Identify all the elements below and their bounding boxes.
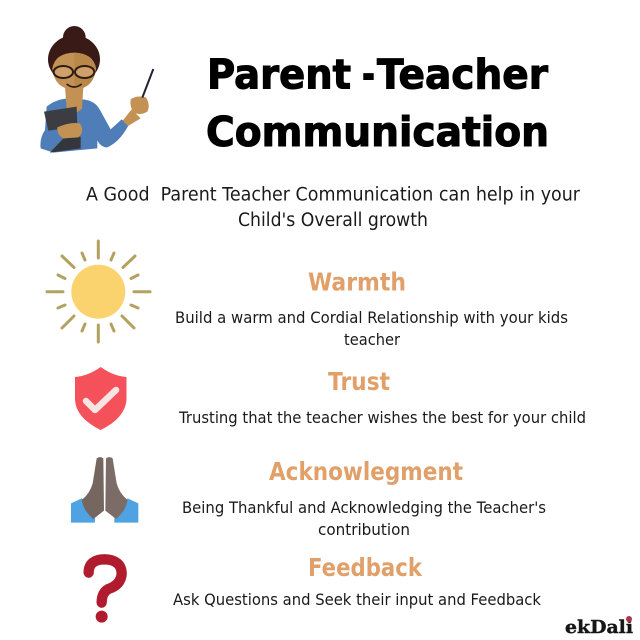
subtitle: A Good Parent Teacher Communication can help in your [86, 184, 580, 206]
text: warmth description: teacher [344, 330, 400, 349]
text: warmth description [175, 308, 568, 349]
icon: teacher with pointer [40, 26, 153, 153]
heading: acknowledgment: Acknowlegment [269, 457, 463, 486]
title: - [362, 50, 375, 98]
subtitle [86, 184, 580, 231]
text: feedback description: Ask Questions and Seek their input and Feedback [173, 590, 542, 609]
heading: feedback: Feedback [308, 553, 423, 582]
logo: ekDali: ekDali [565, 617, 633, 638]
heading: trust: Trust [328, 367, 390, 396]
heading: warmth: Warmth [308, 268, 406, 296]
text: warmth description: Build a warm and Cordial Relationship with your kids [175, 308, 568, 327]
title: Teacher [377, 50, 549, 98]
text: acknowledgment description: Being Thankful and Acknowledging the Teacher's [182, 498, 546, 517]
icon: shield with check [75, 367, 126, 430]
icon: praying hands [71, 457, 138, 523]
title: Communication [206, 108, 549, 156]
icon: sun [47, 241, 150, 342]
icon: question mark [89, 559, 122, 623]
text: acknowledgment description: contribution [318, 520, 410, 539]
subtitle: Child's Overall growth [238, 210, 428, 231]
text: acknowledgment description [182, 498, 546, 539]
title [206, 50, 549, 156]
title: Parent [207, 50, 351, 98]
text: trust description: Trusting that the teacher wishes the best for your child [178, 408, 586, 427]
